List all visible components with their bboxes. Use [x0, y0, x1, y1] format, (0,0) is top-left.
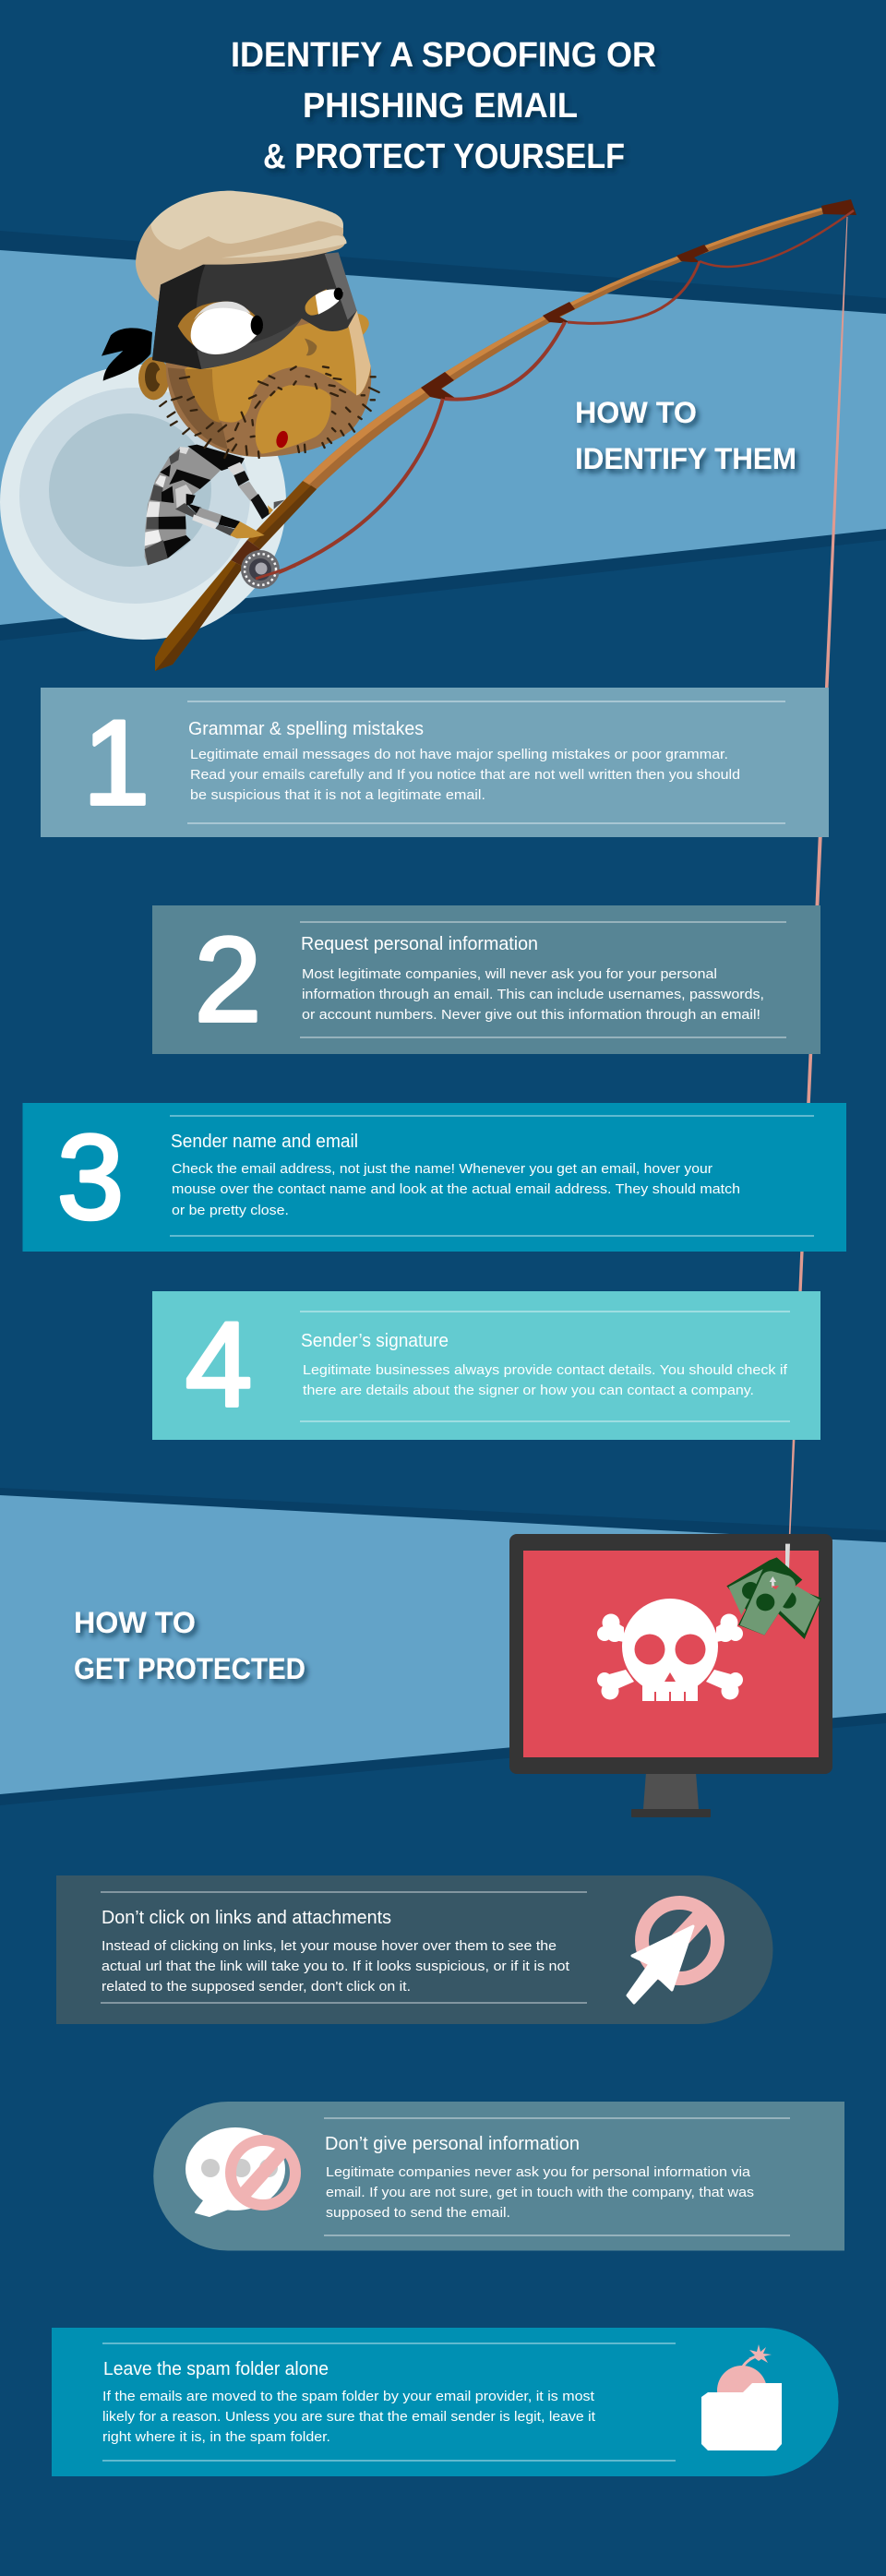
banner: how to identify them — [0, 231, 886, 641]
illustration: hand — [230, 505, 273, 538]
mouth — [274, 429, 290, 449]
heading: Leave the spam folder alone — [103, 2359, 329, 2379]
heading: how to identify them: IDENTIFY THEM — [575, 442, 796, 475]
title: PHISHING EMAIL — [303, 87, 578, 126]
fishing line — [788, 217, 847, 1546]
panel: step 4 signature — [152, 1291, 820, 1440]
step 1 text: be suspicious that it is not a legitimate email. — [190, 787, 485, 803]
step 3 text: Check the email address, not just the name! Whenever you get an email, hover your — [172, 1161, 712, 1177]
step 4 text: there are details about the signer or how you can contact a company. — [303, 1383, 754, 1398]
number 4: 4 — [186, 1297, 252, 1432]
icon: blocked speech bubble — [186, 2127, 295, 2216]
icon: monitor — [509, 1534, 832, 1817]
body text: right where it is, in the spam folder. — [102, 2429, 330, 2445]
title: & PROTECT YOURSELF — [263, 138, 625, 176]
panel: step 3 sender name — [22, 1103, 846, 1252]
title: IDENTIFY A SPOOFING OR — [231, 36, 656, 75]
body text: related to the supposed sender, don't click on it. — [102, 1979, 411, 1995]
panel: step 1 grammar — [41, 688, 829, 837]
step 2 heading: Request personal information — [301, 934, 538, 954]
rod wire loops — [260, 210, 854, 580]
panel: don't click on links — [56, 1875, 773, 2024]
illustration: striped body — [145, 445, 284, 565]
step 3 text: or be pretty close. — [172, 1203, 289, 1218]
step 3 text — [172, 1161, 740, 1218]
body text — [102, 1938, 570, 1995]
heading: how to get protected — [74, 1606, 305, 1685]
panel: leave the spam folder alone — [52, 2328, 838, 2476]
step 4 heading: Sender’s signature — [301, 1331, 449, 1351]
heading: how to identify them — [575, 396, 796, 475]
step 4 text — [303, 1362, 788, 1398]
panel: step 2 personal information — [152, 905, 820, 1054]
heading: Don’t give personal information — [325, 2134, 580, 2154]
face — [160, 252, 371, 457]
rod guides — [421, 199, 856, 400]
ear — [138, 357, 169, 400]
step 2 text: information through an email. This can include usernames, passwords, — [302, 987, 764, 1002]
panel: don't give personal information — [153, 2102, 844, 2250]
body text: supposed to send the email. — [326, 2205, 510, 2221]
number 2: 2 — [195, 912, 261, 1047]
step 4 text: Legitimate businesses always provide contact details. You should check if — [303, 1362, 788, 1378]
step 2 text: or account numbers. Never give out this information through an email! — [302, 1007, 760, 1023]
step 1 text: Read your emails carefully and If you notice that are not well written then you should — [190, 767, 740, 783]
step 1 heading: Grammar & spelling mistakes — [188, 719, 424, 739]
body text: likely for a reason. Unless you are sure that the email sender is legit, leave it — [102, 2409, 596, 2425]
nose — [305, 339, 317, 355]
number 3: 3 — [57, 1109, 124, 1244]
title — [231, 36, 656, 176]
icon: hook with money — [726, 1544, 821, 1639]
banner: how to get protected — [0, 1488, 886, 1805]
mask — [152, 252, 357, 369]
icon: bomb in folder — [701, 2344, 782, 2450]
stubble — [160, 366, 379, 458]
body text: actual url that the link will take you to. If it looks suspicious, or if it is not — [102, 1959, 570, 1974]
step 1 text — [190, 747, 740, 803]
heading: how to get protected: GET PROTECTED — [74, 1652, 305, 1685]
step 1 text: Legitimate email messages do not have major spelling mistakes or poor grammar. — [190, 747, 728, 762]
left eye — [178, 302, 263, 354]
body text: Instead of clicking on links, let your mouse hover over them to see the — [102, 1938, 557, 1954]
fishing rod — [155, 199, 856, 671]
heading: how to identify them: HOW TO — [575, 396, 697, 429]
body text: email. If you are not sure, get in touch with the company, that was — [326, 2185, 754, 2200]
right ear — [357, 314, 369, 336]
fishing reel — [241, 550, 295, 589]
illustration: burglar head — [102, 191, 379, 458]
illustration: background circles — [0, 365, 286, 640]
cap — [136, 191, 347, 302]
icon: skull and crossbones — [597, 1599, 743, 1701]
body text — [102, 2389, 596, 2445]
right eye — [305, 288, 343, 316]
step 3 heading: Sender name and email — [171, 1132, 358, 1152]
step 2 text — [302, 966, 764, 1023]
body text: If the emails are moved to the spam folder by your email provider, it is most — [102, 2389, 595, 2404]
bandana knot — [102, 328, 152, 381]
step 3 text: mouse over the contact name and look at the actual email address. They should match — [172, 1181, 740, 1197]
body text: Legitimate companies never ask you for personal information via — [326, 2164, 751, 2180]
body text — [326, 2164, 754, 2221]
icon: blocked cursor — [628, 1903, 718, 2003]
heading: how to get protected: HOW TO — [74, 1606, 196, 1639]
number 1: 1 — [83, 695, 150, 830]
step 2 text: Most legitimate companies, will never ask you for your personal — [302, 966, 717, 982]
heading: Don’t click on links and attachments — [102, 1908, 391, 1928]
